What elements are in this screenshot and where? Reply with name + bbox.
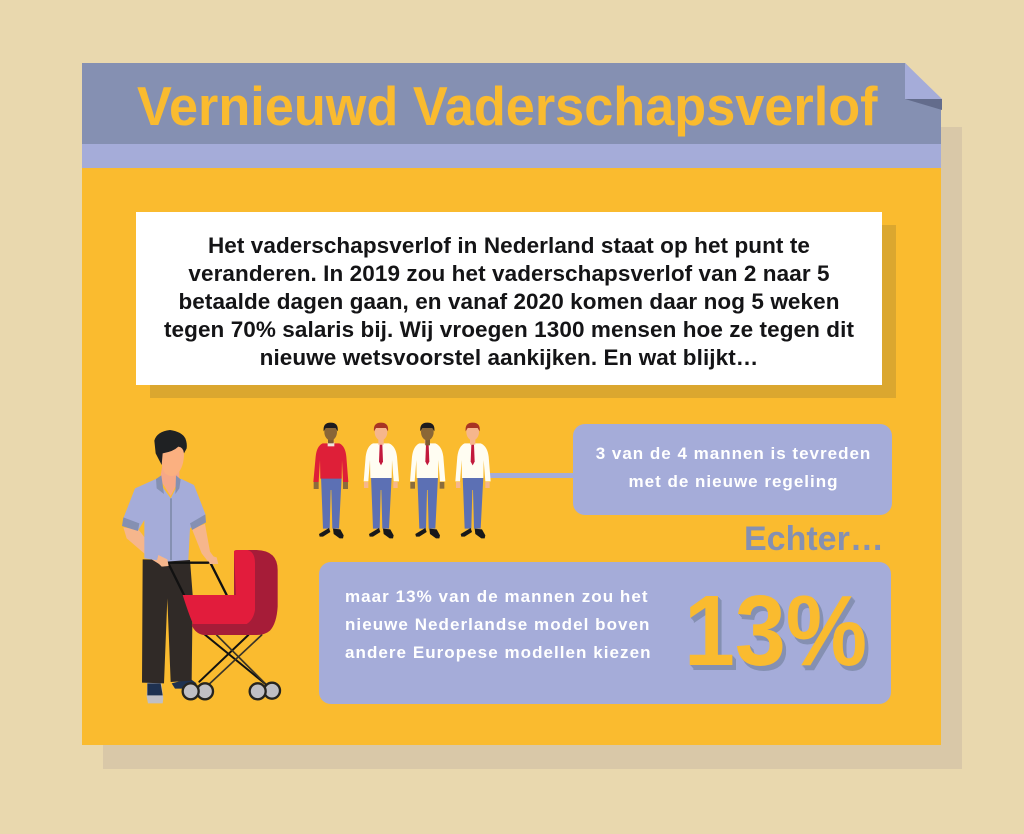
intro paragraph: tegen 70% salaris bij. Wij vroegen 1300 mensen hoe ze tegen dit — [164, 317, 854, 342]
callout text: met de nieuwe regeling — [628, 472, 838, 491]
arms — [123, 524, 217, 567]
intro paragraph: betaalde dagen gaan, en vanaf 2020 komen daar nog 5 weken — [178, 289, 840, 314]
hands — [157, 554, 218, 567]
13 percent description: nieuwe Nederlandse model boven — [345, 615, 650, 634]
head — [154, 430, 187, 476]
panel: callout 3 of 4 men — [573, 424, 892, 515]
intro box shadow — [150, 225, 896, 398]
13 percent description: andere Europese modellen kiezen — [345, 643, 652, 662]
man in white shirt — [364, 423, 399, 538]
title: Vernieuwd Vaderschapsverlof — [137, 75, 878, 137]
shirt — [123, 479, 206, 562]
man in white shirt, dark skin — [410, 423, 445, 538]
13 percent description: maar 13% van de mannen zou het — [345, 587, 649, 606]
icon: four men — [313, 422, 491, 538]
callout text — [596, 444, 871, 491]
intro paragraph: nieuwe wetsvoorstel aankijken. En wat blijkt… — [260, 345, 758, 370]
connector line — [490, 473, 580, 478]
intro paragraph — [164, 233, 854, 370]
trousers — [142, 559, 193, 683]
pram basket — [183, 550, 278, 635]
callout text: 3 van de 4 mannen is tevreden — [596, 444, 871, 463]
13 percent description — [345, 587, 652, 662]
man in white shirt, right — [455, 423, 491, 538]
panel: intro text — [136, 212, 882, 385]
man in red sweater — [313, 423, 348, 538]
heading: Echter: Echter… — [744, 520, 884, 558]
neck — [160, 463, 179, 496]
intro paragraph: veranderen. In 2019 zou het vaderschapsverlof van 2 naar 5 — [188, 261, 830, 286]
intro paragraph: Het vaderschapsverlof in Nederland staat op het punt te — [208, 233, 810, 258]
shoes — [147, 679, 197, 703]
panel: header band — [82, 63, 942, 168]
panel: main yellow sheet — [82, 168, 941, 745]
pram wheels — [183, 683, 280, 699]
big number 13%: 13% — [684, 575, 867, 687]
page shadow — [103, 127, 962, 769]
icon: father with pram — [122, 430, 282, 704]
pram frame — [168, 563, 267, 685]
panel: 13 percent — [319, 562, 891, 704]
